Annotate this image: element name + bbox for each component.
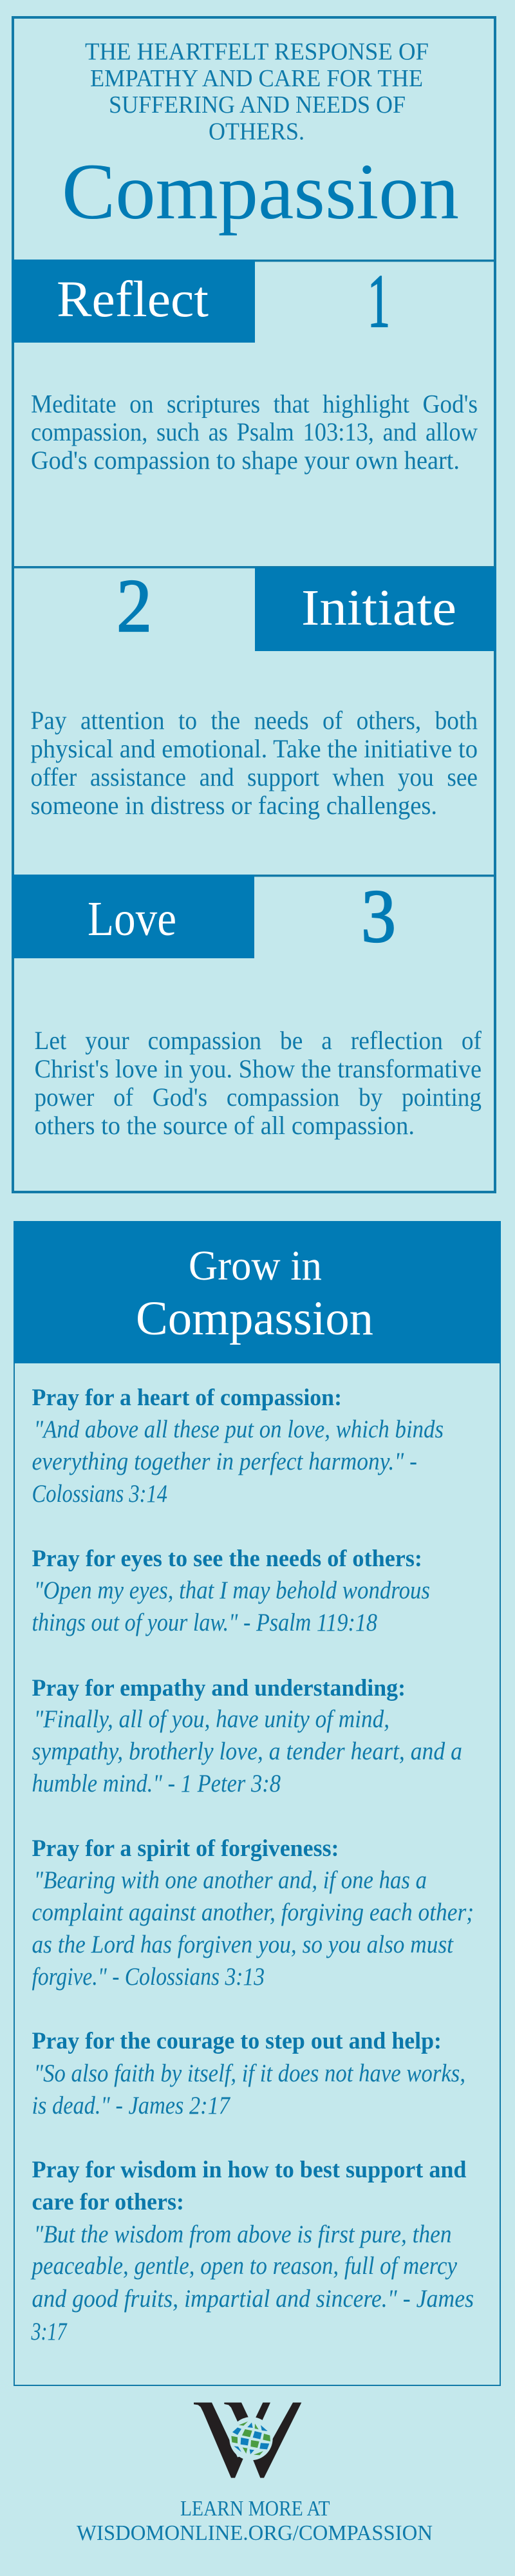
prayer: spirit of forgiveness: as the Lord has forgiven you, so you also must <box>32 1931 454 1958</box>
header: grow in compassion <box>14 1221 501 1363</box>
prayer: empathy and understanding <box>32 1675 462 1797</box>
prayer: empathy and understanding: "Finally, all of you, have unity of mind, <box>33 1705 389 1733</box>
header: grow in compassion: Compassion <box>136 1292 373 1345</box>
prayer: empathy and understanding: Pray for empathy and understanding: <box>32 1675 406 1701</box>
prayer: spirit of forgiveness: Pray for a spirit of forgiveness: <box>32 1835 339 1862</box>
prayer: heart of compassion: everything together in perfect harmony." - <box>32 1448 417 1475</box>
text: initiate body <box>31 706 478 820</box>
number 1: 1 <box>368 259 390 343</box>
prayer: spirit of forgiveness: complaint against another, forgiving each other; <box>32 1899 474 1926</box>
header: grow in compassion: Grow in <box>189 1242 322 1289</box>
prayer: spirit of forgiveness <box>32 1835 474 1991</box>
panel: compassion steps frame <box>12 17 496 1192</box>
prayer: eyes to see <box>32 1546 430 1636</box>
logo: W with globe <box>194 2403 301 2478</box>
prayer: eyes to see: "Open my eyes, that I may behold wondrous <box>33 1577 430 1604</box>
prayer: wisdom to support <box>30 2157 474 2345</box>
prayer: heart of compassion <box>32 1385 444 1508</box>
text: reflect body: compassion, such as Psalm 103:13, and allow <box>31 417 478 446</box>
panel: grow in compassion <box>14 1221 501 2385</box>
prayer: courage to step out: Pray for the courage to step out and help: <box>32 2028 442 2054</box>
section 3 divider <box>12 875 496 877</box>
globe <box>229 2417 273 2460</box>
label: Reflect: Reflect <box>57 272 209 328</box>
title: Compassion <box>62 147 459 236</box>
number 3: 3 <box>361 874 396 958</box>
tagline: OTHERS. <box>209 118 304 146</box>
text: reflect body: Meditate on scriptures that highlight God's <box>31 390 478 419</box>
footer call to action <box>77 2497 433 2545</box>
prayer: wisdom to support: "But the wisdom from above is first pure, then <box>33 2221 452 2248</box>
prayer: heart of compassion: Pray for a heart of compassion: <box>32 1385 342 1411</box>
prayer: eyes to see: Pray for eyes to see the needs of others: <box>32 1546 422 1572</box>
section 1 divider <box>12 260 496 261</box>
text: initiate body: offer assistance and support when you see <box>31 762 478 791</box>
prayer: heart of compassion: "And above all these put on love, which binds <box>33 1416 444 1443</box>
section 2 divider <box>12 566 496 568</box>
prayer: wisdom to support: care for others: <box>32 2189 184 2215</box>
prayer: empathy and understanding: humble mind." - 1 Peter 3:8 <box>32 1770 281 1797</box>
footer call to action: LEARN MORE AT <box>180 2497 330 2521</box>
footer call to action: WISDOMONLINE.ORG/COMPASSION <box>77 2521 433 2545</box>
prayer: empathy and understanding: sympathy, brotherly love, a tender heart, and a <box>32 1738 462 1765</box>
number 2: 2 <box>117 564 152 648</box>
text: reflect body <box>31 390 478 475</box>
tagline <box>85 39 429 146</box>
prayer: courage to step out: is dead." - James 2:17 <box>32 2092 230 2119</box>
text: love body: others to the source of all compassion. <box>35 1111 415 1140</box>
prayer: wisdom to support: 3:17 <box>31 2318 68 2345</box>
label: Initiate: Initiate <box>301 580 456 636</box>
text: reflect body: God's compassion to shape your own heart. <box>31 446 460 475</box>
prayer: wisdom to support: peaceable, gentle, open to reason, full of mercy <box>30 2252 458 2280</box>
text: love body: Let your compassion be a reflection of <box>35 1026 482 1055</box>
text: initiate body: Pay attention to the needs of others, both <box>31 706 478 735</box>
label: Reflect <box>12 260 255 343</box>
label: Initiate <box>255 567 496 651</box>
tagline: EMPATHY AND CARE FOR THE <box>90 65 423 92</box>
text: initiate body: physical and emotional. Take the initiative to <box>31 734 478 763</box>
prayer: spirit of forgiveness: "Bearing with one another and, if one has a <box>33 1866 427 1894</box>
prayer: courage to step out <box>32 2028 465 2119</box>
text: initiate body: someone in distress or facing challenges. <box>31 791 437 820</box>
tagline: SUFFERING AND NEEDS OF <box>109 91 406 118</box>
prayer: wisdom to support: and good fruits, impartial and sincere." - James <box>32 2285 474 2313</box>
text: love body: Christ's love in you. Show the transformative <box>35 1054 482 1083</box>
text: love body: power of God's compassion by pointing <box>35 1083 482 1112</box>
prayer: courage to step out: "So also faith by itself, if it does not have works, <box>33 2060 465 2087</box>
prayer: spirit of forgiveness: forgive." - Colossians 3:13 <box>32 1963 265 1991</box>
label: Love: Love <box>88 892 176 946</box>
prayer: heart of compassion: Colossians 3:14 <box>32 1480 167 1508</box>
prayer: wisdom to support: Pray for wisdom in how to best support and <box>32 2157 467 2183</box>
tagline: THE HEARTFELT RESPONSE OF <box>85 39 429 66</box>
prayer: eyes to see: things out of your law." - Psalm 119:18 <box>32 1609 377 1636</box>
label: Love <box>12 875 254 958</box>
text: love body <box>35 1026 482 1140</box>
